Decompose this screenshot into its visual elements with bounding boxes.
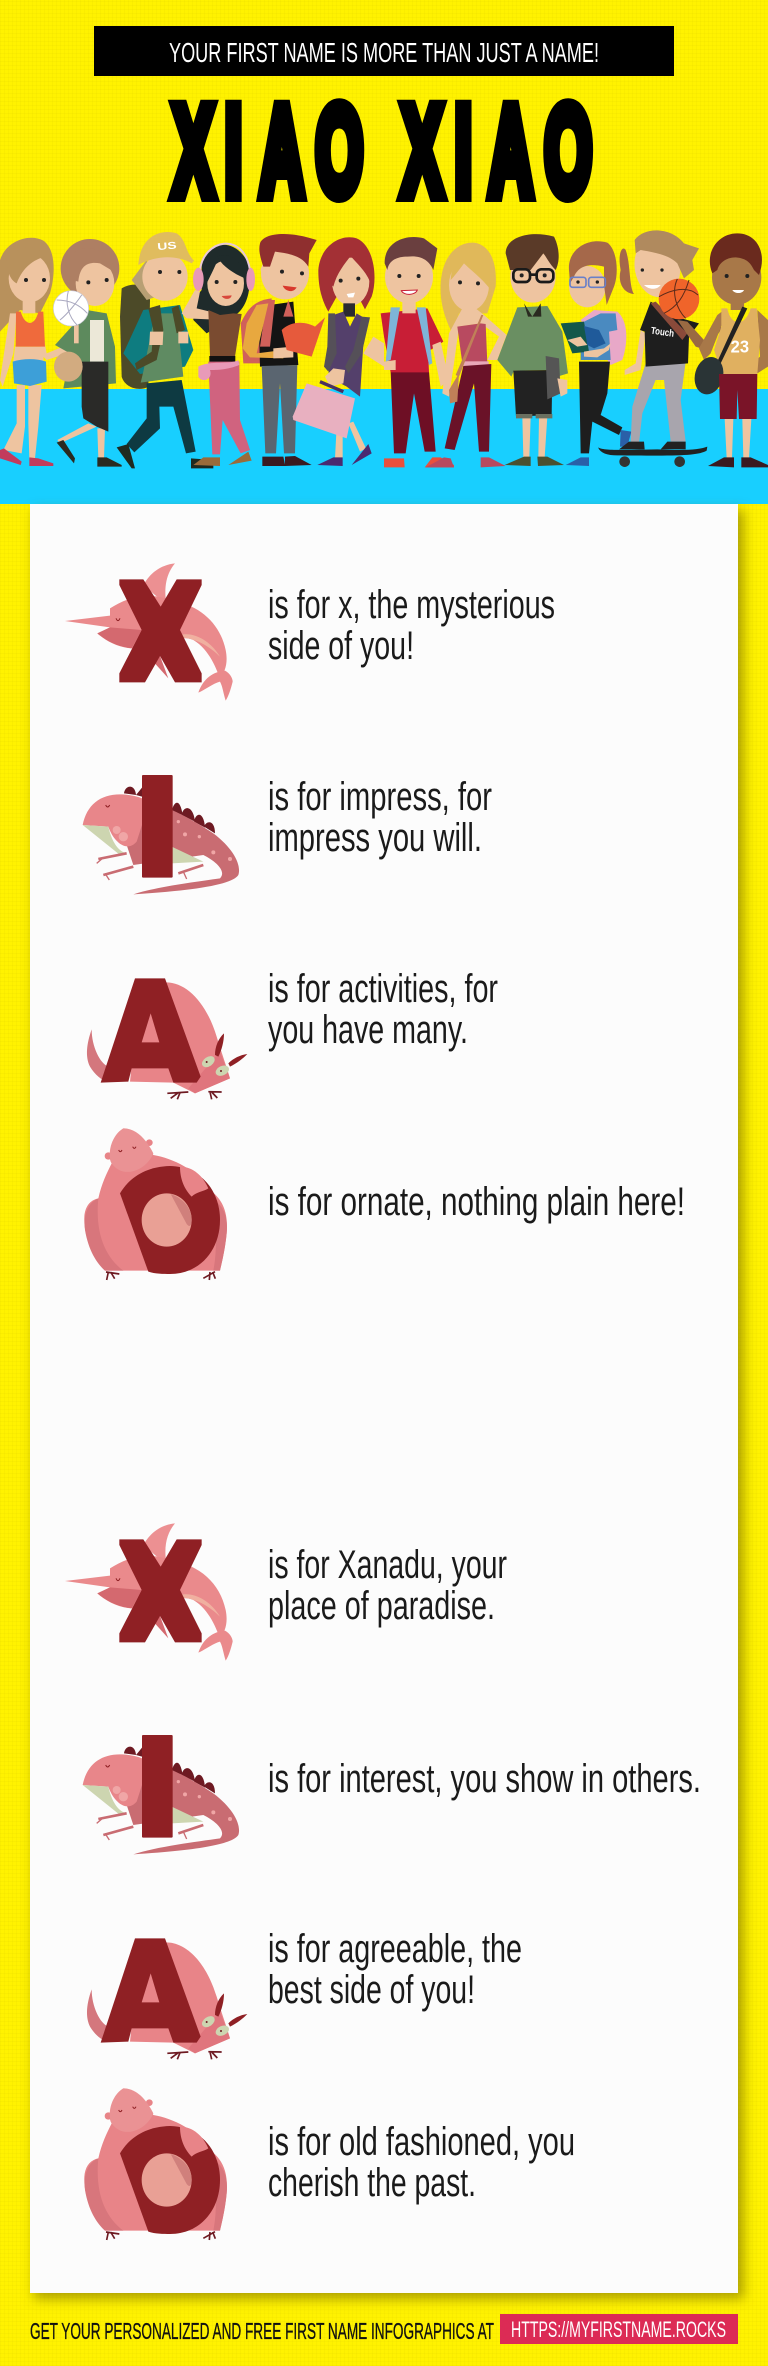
person: boy in basketball jersey [691, 233, 768, 467]
person: blonde girl [426, 243, 507, 467]
row: I for interest [83, 1735, 701, 1854]
text: is for old fashioned: cherish the past. [268, 2161, 476, 2205]
row: O for ornate [84, 1128, 685, 1280]
person: boy with cap and backpack [117, 232, 213, 468]
person: boy in basketball jersey: 23 [731, 337, 749, 357]
text: is for old fashioned [268, 2120, 575, 2205]
icon: A armadillo second [87, 1938, 247, 2059]
text: is for old fashioned: is for old fashioned, you [268, 2120, 575, 2164]
text: is for agreeable: best side of you! [268, 1968, 475, 2012]
person: girl in orange top [0, 238, 77, 466]
text: is for x: side of you! [268, 624, 414, 668]
icon: X swordfish [65, 563, 233, 701]
person: boy on skateboard: Touch [650, 326, 675, 340]
text: is for activities [268, 967, 498, 1052]
text: is for activities: you have many. [268, 1008, 468, 1052]
footer [30, 2314, 738, 2344]
icon: A armadillo [87, 978, 247, 1099]
person: boy in red tee [381, 237, 454, 467]
text: is for Xanadu [268, 1543, 507, 1628]
person: girl with headphones [182, 244, 255, 466]
icon: I iguana [83, 775, 239, 894]
text: is for agreeable: is for agreeable, the [268, 1927, 522, 1971]
person: boy with book [241, 234, 325, 466]
text: is for Xanadu: place of paradise. [268, 1584, 495, 1628]
person: boy with glasses [497, 234, 568, 466]
icon: X swordfish second [65, 1523, 233, 1661]
text: is for agreeable [268, 1927, 522, 2012]
illustration: group of students [0, 230, 768, 468]
person: girl with ponytail [561, 241, 634, 466]
person: boy on skateboard [598, 230, 722, 467]
row: I for impress [83, 775, 492, 894]
person: boy with cap and backpack: US [157, 240, 178, 253]
title: XIAO XIAO [173, 81, 592, 221]
row: X for x [65, 563, 555, 701]
row: X for Xanadu [65, 1523, 507, 1661]
person: girl with pink bag [293, 237, 384, 466]
text: is for Xanadu: is for Xanadu, your [268, 1543, 507, 1587]
floor band [0, 389, 768, 504]
text: is for x: is for x, the mysterious [268, 583, 555, 627]
icon: O mole second [84, 2088, 227, 2240]
text: is for impress [268, 775, 492, 860]
panel: name meanings [30, 504, 738, 2293]
text: is for impress: is for impress, for [268, 775, 492, 819]
text: is for impress: impress you will. [268, 816, 482, 860]
row: O for old fashioned [84, 2088, 575, 2240]
icon: I iguana second [83, 1735, 239, 1854]
row: A for agreeable [87, 1927, 522, 2059]
icon: O mole [84, 1128, 227, 1280]
row: A for activities [87, 967, 498, 1099]
panel shadow [34, 510, 744, 2299]
person: girl with volleyball [53, 239, 122, 467]
text: is for activities: is for activities, for [268, 967, 498, 1011]
text: is for x [268, 583, 555, 668]
tagline banner [94, 26, 674, 76]
